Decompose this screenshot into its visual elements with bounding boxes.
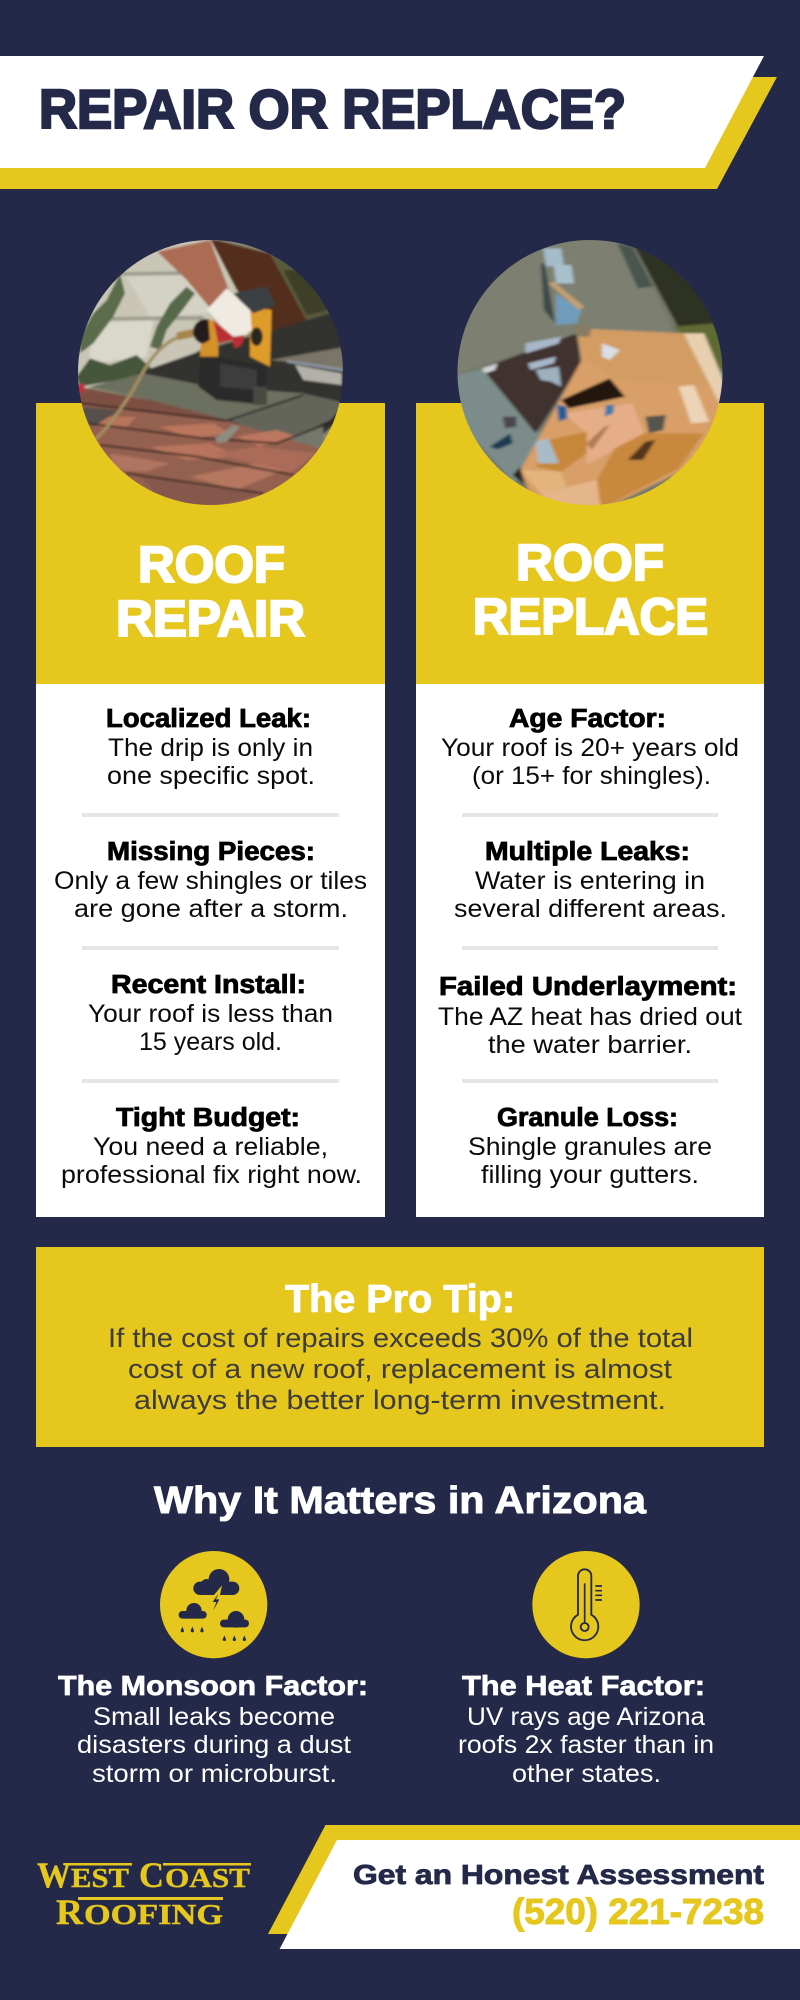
item: tight budget: Tight Budget: — [116, 1104, 300, 1132]
item: tight budget — [61, 1104, 362, 1189]
pro tip body: If the cost of repairs exceeds 30% of the total — [108, 1323, 693, 1353]
pale boards — [684, 333, 724, 403]
item: recent install: 15 years old. — [139, 1028, 282, 1056]
item: recent install — [88, 971, 333, 1056]
item: multiple leaks: several different areas. — [454, 895, 727, 923]
item: multiple leaks — [454, 838, 727, 923]
header banner — [0, 56, 777, 189]
item: age factor: Age Factor: — [509, 705, 666, 733]
text block: heat factor: roofs 2x faster than in — [458, 1731, 714, 1759]
pro tip heading: The Pro Tip: — [285, 1278, 515, 1321]
item: age factor: (or 15+ for shingles). — [472, 762, 711, 790]
arm — [157, 240, 228, 310]
item: missing pieces: Missing Pieces: — [107, 838, 315, 866]
logo: west coast roofing: OAST — [165, 1863, 250, 1893]
item: failed underlayment: The AZ heat has dried out — [438, 1003, 742, 1031]
hammer and debris — [215, 425, 240, 443]
heading: roof repair: ROOF — [138, 536, 285, 593]
item: localized leak: one specific spot. — [107, 762, 315, 790]
text block: monsoon factor: storm or microburst. — [92, 1760, 337, 1788]
shingle pile vents — [543, 248, 564, 267]
item: tight budget: professional fix right now. — [61, 1161, 362, 1189]
icon: thermometer — [532, 1551, 640, 1658]
text block: monsoon factor: The Monsoon Factor: — [58, 1670, 368, 1701]
item: recent install: Your roof is less than — [88, 1000, 333, 1028]
item: granule loss: filling your gutters. — [481, 1161, 699, 1189]
text block: monsoon factor: disasters during a dust — [77, 1731, 351, 1759]
item: multiple leaks: Multiple Leaks: — [485, 838, 690, 866]
item: granule loss: Granule Loss: — [497, 1104, 678, 1132]
heading: why it matters in arizona: Why It Matters in Arizona — [154, 1480, 647, 1522]
heading: roof replace: REPLACE — [473, 588, 708, 645]
icon: storm clouds — [160, 1551, 267, 1658]
nailer body — [250, 307, 272, 367]
logo: west coast roofing: R — [56, 1892, 84, 1932]
item: localized leak: The drip is only in — [108, 734, 313, 762]
bottom-left shingles — [449, 368, 541, 483]
item: granule loss: Shingle granules are — [468, 1133, 712, 1161]
item: failed underlayment — [438, 973, 742, 1059]
text block: heat factor: UV rays age Arizona — [467, 1703, 705, 1731]
item: localized leak — [106, 705, 315, 790]
logo: west coast roofing: C — [139, 1855, 164, 1895]
logo: west coast roofing: OOFING — [84, 1899, 223, 1931]
nailer magazine — [198, 356, 254, 404]
text block: heat factor: other states. — [512, 1760, 661, 1788]
green grey patch — [90, 373, 305, 421]
trees — [633, 248, 718, 340]
logo: west coast roofing — [37, 1855, 254, 1932]
item: multiple leaks: Water is entering in — [475, 867, 705, 895]
dark underlayment — [482, 333, 581, 433]
panel: roof replace list — [416, 684, 764, 1217]
item: failed underlayment: Failed Underlayment: — [439, 973, 737, 1001]
item: localized leak: Localized Leak: — [106, 705, 311, 733]
footer call to action banner — [268, 1825, 800, 1949]
orange decking — [520, 328, 730, 510]
title: REPAIR OR REPLACE? — [39, 78, 626, 140]
phone number: (520) 221-7238 — [512, 1891, 764, 1932]
item: missing pieces: Only a few shingles or tiles — [54, 867, 367, 895]
text block: monsoon factor: Small leaks become — [93, 1703, 335, 1731]
item: tight budget: You need a reliable, — [93, 1133, 328, 1161]
workers — [557, 405, 567, 422]
logo: west coast roofing: EST — [71, 1863, 129, 1893]
photo: nail gun on shingles — [78, 240, 343, 505]
text block: monsoon factor — [58, 1670, 368, 1788]
item: failed underlayment: the water barrier. — [488, 1031, 692, 1059]
item: age factor — [441, 705, 739, 790]
glove — [207, 288, 252, 345]
debris white — [602, 343, 620, 360]
red brown shingles — [80, 388, 222, 420]
logo: west coast roofing: W — [37, 1855, 71, 1895]
pro tip body: always the better long-term investment. — [134, 1385, 666, 1415]
heading: roof replace: ROOF — [516, 534, 664, 591]
text block: heat factor — [458, 1670, 714, 1788]
pro tip body: cost of a new roof, replacement is almost — [128, 1354, 673, 1384]
panel: roof replace header — [416, 403, 764, 684]
callout: the pro tip — [36, 1247, 764, 1447]
panel: roof repair list — [36, 684, 385, 1217]
panel: roof repair header — [36, 403, 385, 684]
item: recent install: Recent Install: — [111, 971, 306, 999]
text block: heat factor: The Heat Factor: — [462, 1670, 705, 1701]
item: age factor: Your roof is 20+ years old — [441, 734, 739, 762]
roof opening — [561, 378, 625, 408]
darker patches — [536, 432, 587, 472]
item: missing pieces: are gone after a storm. — [74, 895, 348, 923]
roof dark shingles — [138, 313, 343, 434]
heading: roof repair: REPAIR — [116, 590, 305, 647]
nailer coil — [192, 318, 212, 346]
pale pink deck — [564, 403, 644, 465]
photo: aerial roof replacement — [458, 240, 722, 505]
hose — [95, 337, 180, 439]
cta text: Get an Honest Assessment — [353, 1859, 764, 1890]
item: granule loss — [468, 1104, 712, 1189]
item: missing pieces — [54, 838, 367, 923]
